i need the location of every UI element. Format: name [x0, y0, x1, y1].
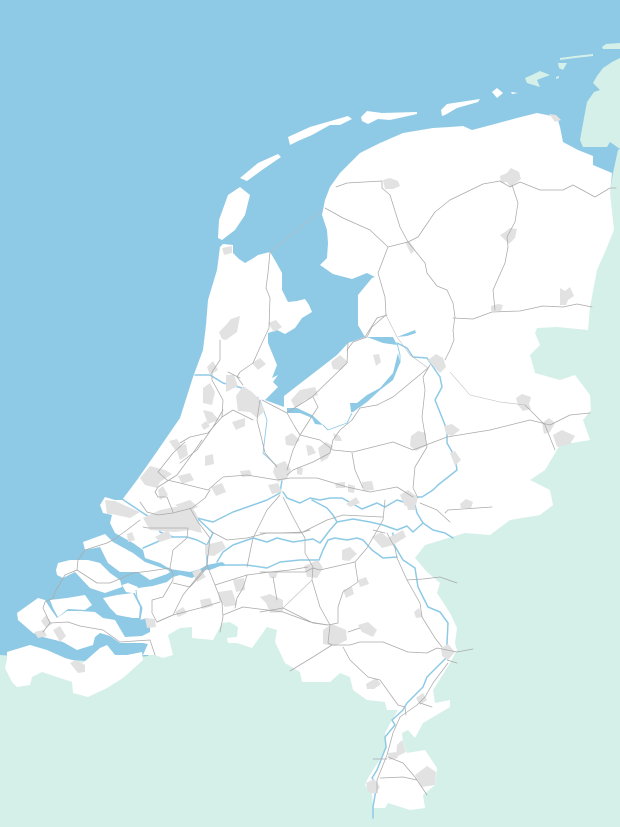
- land: Zeeuws-Vlaanderen: [5, 645, 143, 697]
- land: Wadden islands: [218, 88, 518, 240]
- urban areas: [34, 114, 575, 794]
- land: Tholen: [103, 593, 140, 618]
- land: Goeree-Overflakkee: [83, 534, 170, 580]
- land: mainland: [100, 113, 614, 810]
- land: Schouwen-Duiveland: [56, 560, 122, 593]
- roads: [43, 181, 616, 795]
- land: Walcheren and Zuid-Beveland: [17, 598, 152, 650]
- land: Sint Philipsland: [122, 583, 138, 593]
- inner lakes: [200, 330, 416, 570]
- land: Noord-Beveland: [50, 595, 92, 617]
- rivers: [122, 343, 457, 818]
